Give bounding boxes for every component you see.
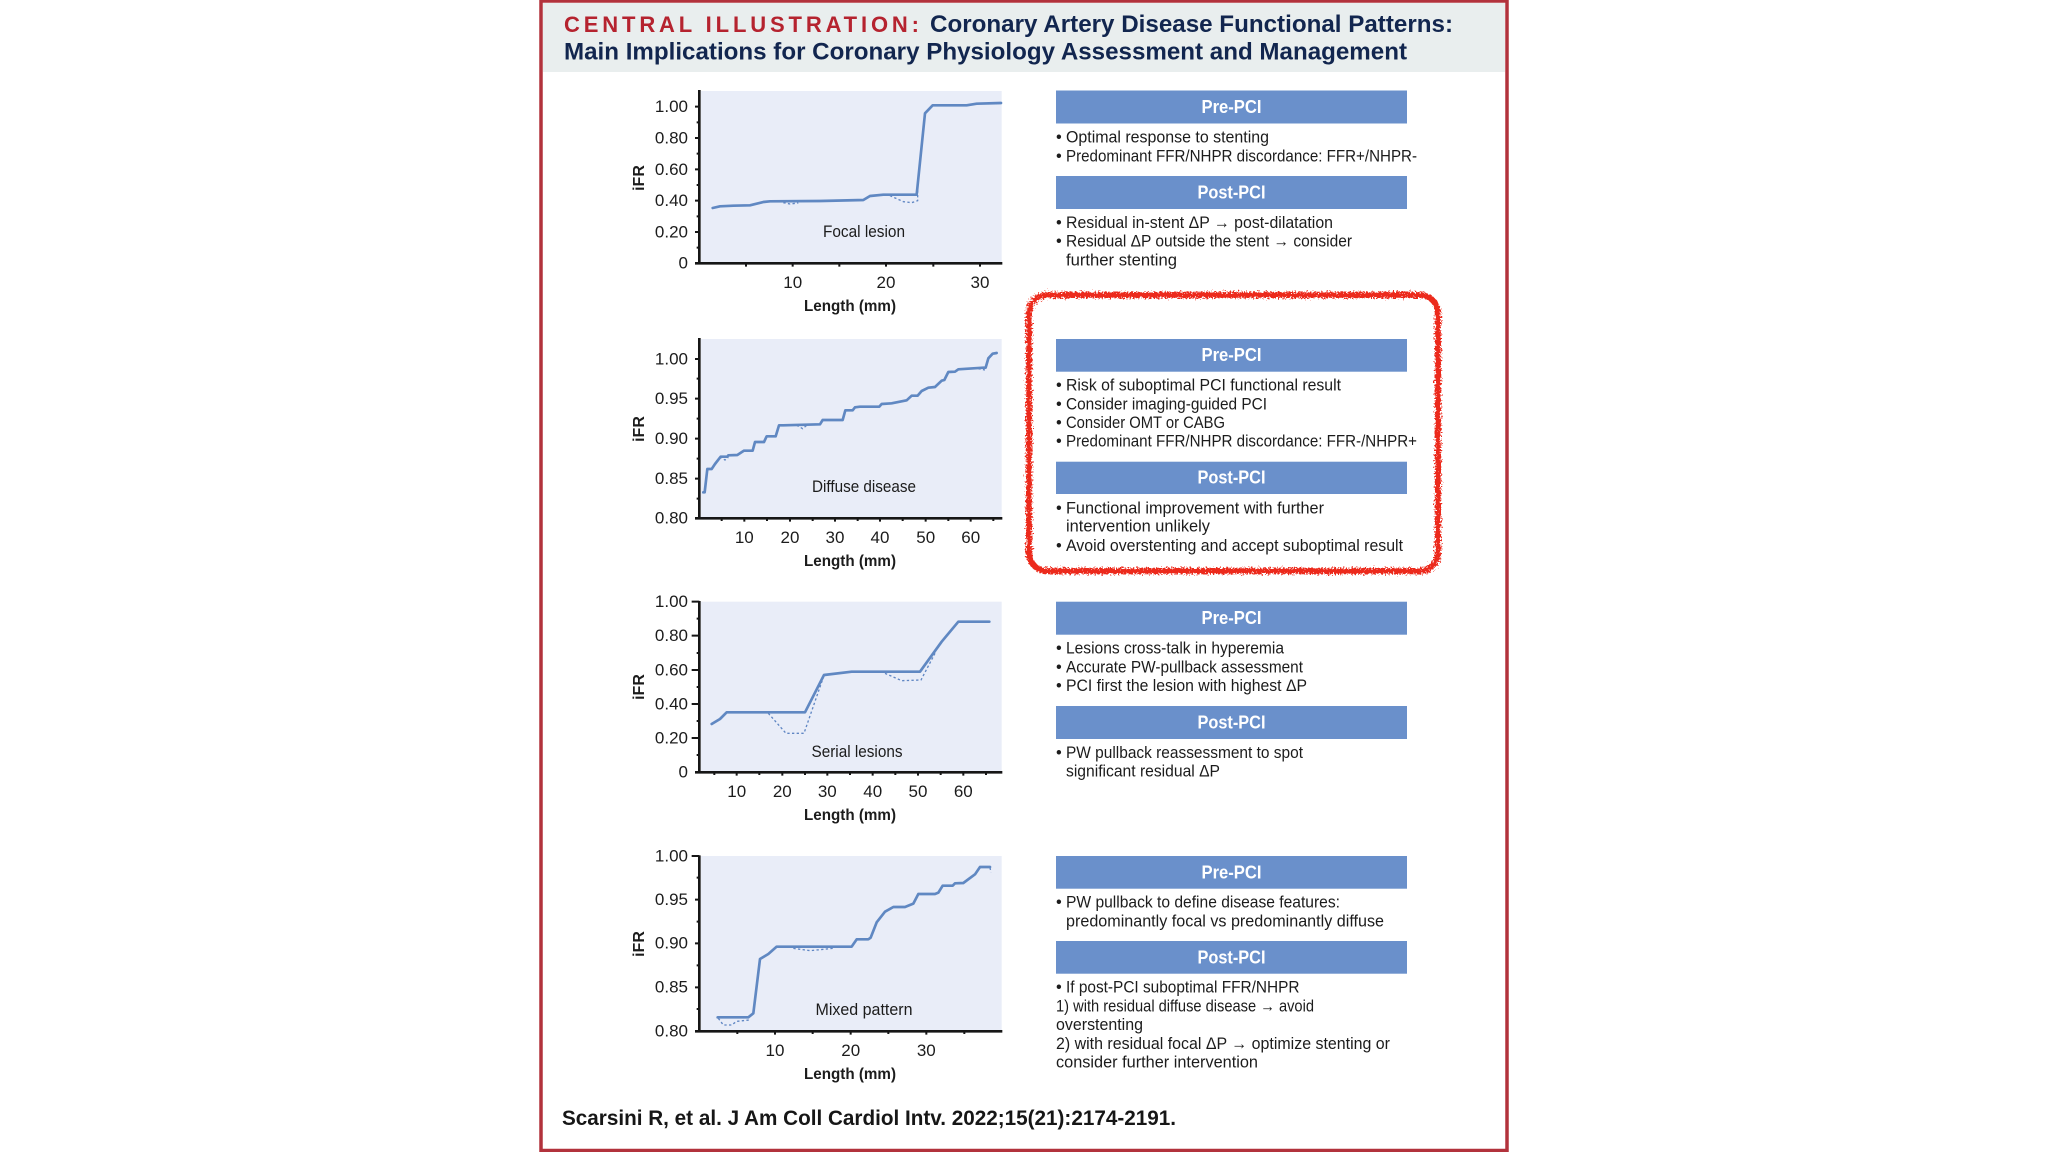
panel: mixed pattern implications (1056, 856, 1407, 1072)
panel: diffuse disease implications: Pre-PCI (1202, 344, 1262, 365)
chart: mixed pattern: 30 (917, 1041, 936, 1060)
chart: serial lesions (631, 592, 1002, 824)
chart: mixed pattern: 0.80 (655, 1022, 688, 1040)
panel: diffuse disease implications: Consider imaging-guided PCI (1066, 395, 1267, 413)
chart: serial lesions: 10 (727, 782, 746, 801)
panel: serial lesions implications: PCI first the lesion with highest ΔP (1066, 677, 1307, 695)
chart: mixed pattern: 0.85 (655, 978, 688, 996)
panel: mixed pattern implications: overstenting (1056, 1016, 1143, 1034)
panel: focal lesion implications: Predominant FFR/NHPR discordance: FFR+/NHPR- (1066, 147, 1417, 165)
panel: diffuse disease implications: intervention unlikely (1066, 518, 1211, 536)
citation: Scarsini R, et al. J Am Coll Cardiol Intv. 2022;15(21):2174-2191. (562, 1106, 1176, 1130)
panel: mixed pattern implications: consider further intervention (1056, 1054, 1258, 1072)
panel: focal lesion implications: Pre-PCI (1202, 96, 1262, 117)
chart: serial lesions: 30 (818, 782, 837, 801)
panel: focal lesion implications: • (1056, 233, 1062, 251)
chart: serial lesions: 40 (863, 782, 882, 801)
panel: serial lesions implications: • (1056, 640, 1062, 658)
chart: mixed pattern (631, 846, 1002, 1083)
panel: diffuse disease implications: • (1056, 499, 1062, 517)
panel: diffuse disease implications: • (1056, 395, 1062, 413)
title band (543, 3, 1505, 72)
chart: diffuse disease: 50 (916, 528, 935, 547)
panel: focal lesion implications: Residual in-stent ΔP → post-dilatation (1066, 214, 1333, 232)
frame (541, 1, 1507, 1150)
panel: serial lesions implications: significant residual ΔP (1066, 763, 1220, 781)
chart: serial lesions: 50 (909, 782, 927, 801)
chart: mixed pattern: 10 (766, 1041, 784, 1060)
panel: serial lesions implications: • (1056, 677, 1062, 695)
panel: diffuse disease implications: Predominant FFR/NHPR discordance: FFR-/NHPR+ (1066, 433, 1417, 451)
panel: serial lesions implications: Pre-PCI (1202, 607, 1262, 628)
panel: mixed pattern implications: Pre-PCI (1202, 862, 1262, 882)
chart: serial lesions: 0.80 (655, 626, 688, 645)
panel: focal lesion implications: Optimal response to stenting (1066, 129, 1269, 147)
chart: mixed pattern: 1.00 (655, 846, 688, 866)
panel: diffuse disease implications: Risk of suboptimal PCI functional result (1066, 377, 1341, 395)
panel: diffuse disease implications: Consider OMT or CABG (1066, 414, 1225, 432)
chart: focal lesion: 30 (971, 273, 989, 292)
chart: diffuse disease: 20 (781, 528, 799, 547)
panel: diffuse disease implications: • (1056, 414, 1062, 432)
panel: mixed pattern implications: 1) with residual diffuse disease → avoid (1056, 997, 1314, 1015)
title band: Coronary Artery Disease Functional Patterns: (930, 11, 1453, 38)
chart: diffuse disease: 0.80 (655, 508, 688, 528)
chart: diffuse disease (631, 338, 1002, 570)
chart: focal lesion: 0.80 (655, 128, 688, 148)
title band: Main Implications for Coronary Physiology Assessment and Management (564, 38, 1407, 66)
chart: serial lesions: Serial lesions (812, 743, 902, 761)
chart: diffuse disease: 0.90 (655, 429, 688, 448)
chart: diffuse disease: 0.85 (655, 469, 688, 488)
panel: serial lesions implications: Lesions cross-talk in hyperemia (1066, 640, 1285, 658)
panel: serial lesions implications: Post-PCI (1198, 712, 1266, 732)
chart: mixed pattern: 20 (841, 1041, 860, 1060)
chart: mixed pattern: 0.95 (655, 890, 688, 909)
chart: mixed pattern: Mixed pattern (816, 1001, 912, 1019)
chart: focal lesion: Focal lesion (823, 223, 905, 241)
chart: focal lesion: 0.40 (655, 191, 688, 210)
panel: diffuse disease implications: Post-PCI (1198, 467, 1266, 488)
panel: diffuse disease implications: Functional improvement with further (1066, 499, 1325, 517)
chart: serial lesions: 1.00 (655, 592, 688, 611)
chart: focal lesion: Length (mm) (804, 298, 896, 315)
panel: mixed pattern implications: predominantly focal vs predominantly diffuse (1066, 912, 1384, 930)
chart: serial lesions: 0 (679, 762, 688, 782)
panel: mixed pattern implications: PW pullback to define disease features: (1066, 894, 1340, 912)
chart: serial lesions: 0.40 (655, 694, 688, 714)
panel: serial lesions implications: • (1056, 658, 1062, 676)
chart: focal lesion: iFR (631, 165, 648, 191)
panel: focal lesion implications: • (1056, 147, 1062, 165)
chart: serial lesions: 60 (954, 782, 973, 801)
panel: diffuse disease implications (1056, 339, 1417, 555)
chart: diffuse disease: 30 (826, 528, 844, 547)
callout: red highlight around diffuse disease (1029, 295, 1438, 571)
chart: mixed pattern: Length (mm) (804, 1066, 896, 1083)
panel: focal lesion implications: • (1056, 129, 1062, 147)
title band: CENTRAL ILLUSTRATION: (564, 12, 919, 37)
chart: serial lesions: Length (mm) (804, 807, 896, 824)
chart: focal lesion: 20 (877, 273, 895, 292)
chart: mixed pattern: 0.90 (655, 934, 688, 952)
chart: diffuse disease: iFR (631, 416, 648, 442)
chart: diffuse disease: 0.95 (655, 389, 688, 408)
chart: diffuse disease: 60 (961, 528, 980, 547)
panel: diffuse disease implications: Avoid overstenting and accept suboptimal result (1066, 537, 1403, 555)
chart: diffuse disease: Length (mm) (804, 553, 896, 570)
chart: focal lesion (631, 90, 1002, 315)
panel: diffuse disease implications: • (1056, 377, 1062, 395)
chart: diffuse disease: 40 (871, 528, 889, 547)
panel: focal lesion implications: Residual ΔP outside the stent → consider (1066, 233, 1353, 251)
panel: mixed pattern implications: If post-PCI suboptimal FFR/NHPR (1066, 978, 1300, 996)
chart: serial lesions: 0.20 (655, 728, 688, 748)
panel: serial lesions implications: • (1056, 744, 1062, 762)
chart: serial lesions: 20 (773, 782, 792, 801)
chart: diffuse disease: 1.00 (655, 350, 688, 368)
panel: mixed pattern implications: Post-PCI (1198, 946, 1266, 968)
chart: focal lesion: 1.00 (655, 97, 688, 116)
panel: serial lesions implications: PW pullback reassessment to spot (1066, 744, 1303, 762)
panel: mixed pattern implications: • (1056, 978, 1062, 996)
chart: focal lesion: 10 (783, 273, 802, 292)
panel: mixed pattern implications: • (1056, 894, 1062, 912)
chart: serial lesions: 0.60 (655, 660, 688, 680)
panel: focal lesion implications: further stenting (1066, 252, 1177, 270)
chart: focal lesion: 0 (679, 254, 688, 272)
panel: focal lesion implications (1056, 90, 1417, 270)
panel: serial lesions implications: Accurate PW-pullback assessment (1066, 658, 1303, 676)
chart: focal lesion: 0.60 (655, 160, 688, 179)
panel: diffuse disease implications: • (1056, 537, 1062, 555)
panel: focal lesion implications: Post-PCI (1198, 182, 1266, 202)
chart: mixed pattern: iFR (631, 931, 648, 957)
panel: mixed pattern implications: 2) with residual focal ΔP → optimize stenting or (1056, 1035, 1391, 1053)
chart: serial lesions: iFR (631, 674, 648, 700)
chart: focal lesion: 0.20 (655, 222, 688, 242)
chart: diffuse disease: 10 (735, 528, 754, 547)
panel: diffuse disease implications: • (1056, 433, 1062, 451)
chart: diffuse disease: Diffuse disease (812, 478, 916, 496)
panel: focal lesion implications: • (1056, 214, 1062, 232)
panel: serial lesions implications (1056, 602, 1407, 781)
